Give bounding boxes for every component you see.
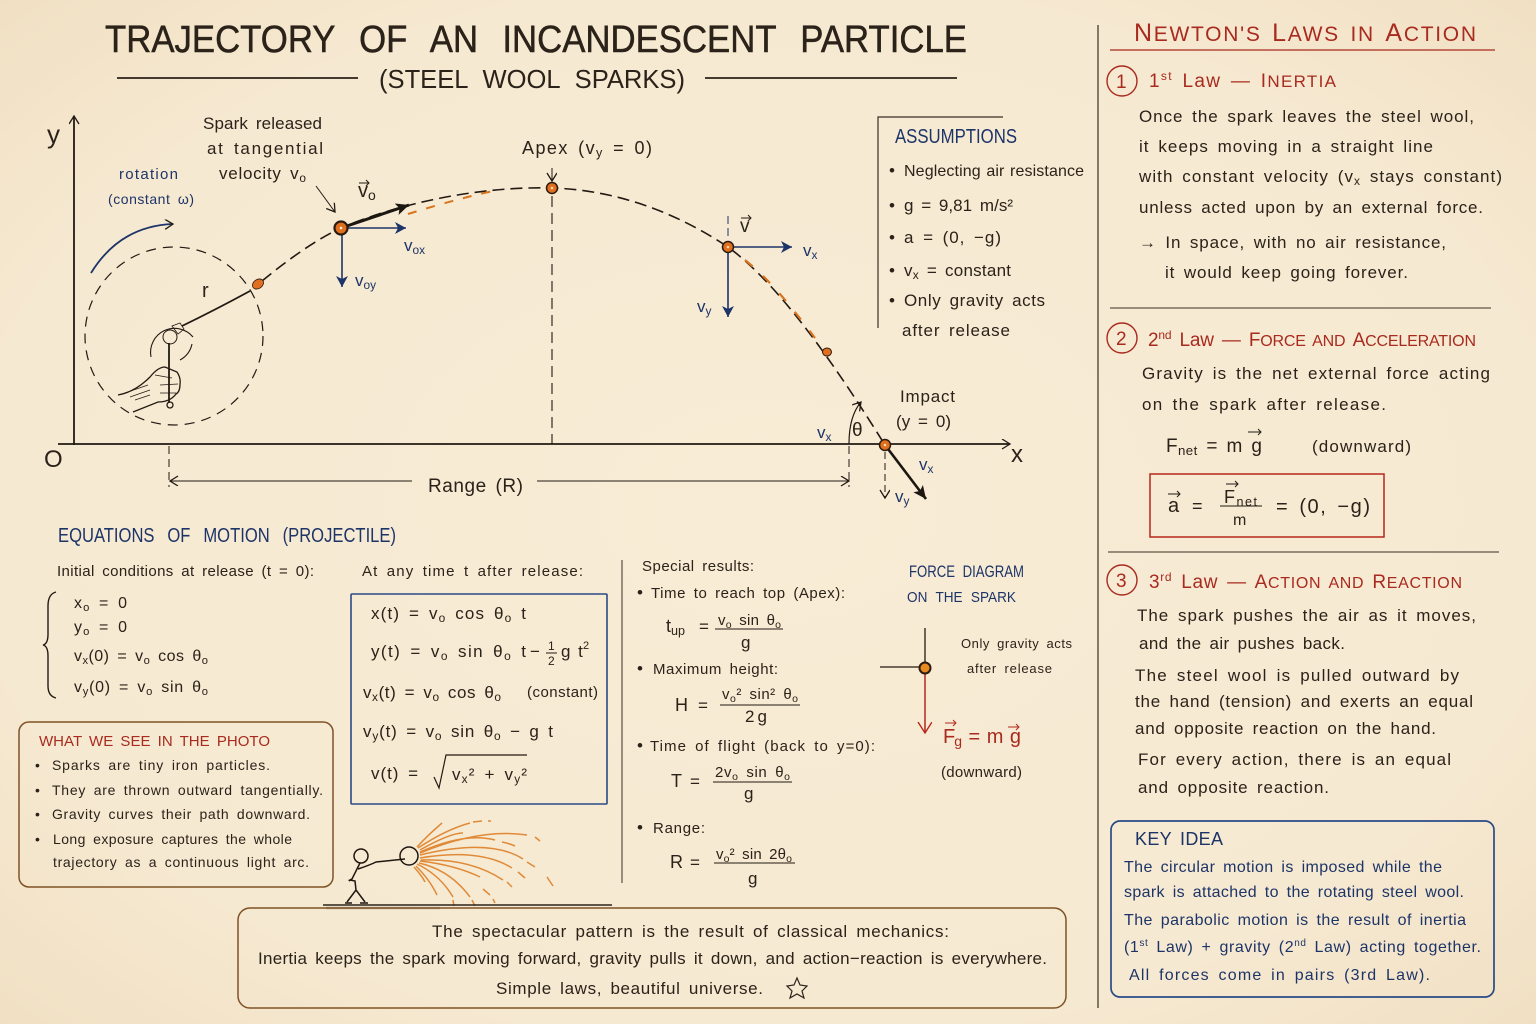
- release label: Spark released: [203, 114, 322, 133]
- axes: O: [44, 446, 63, 473]
- first law: [1107, 66, 1502, 282]
- radius label: r: [202, 280, 209, 302]
- range formula: =: [690, 853, 700, 872]
- formula box: a: [1168, 495, 1180, 517]
- second law heading: 2: [1148, 330, 1159, 351]
- range dimension: Range (R): [428, 476, 523, 497]
- descent velocity vectors: [697, 215, 818, 318]
- panel: what we see in the photo: [19, 722, 333, 887]
- formula box: m: [1233, 512, 1246, 529]
- dashed trajectory: [262, 188, 885, 445]
- panel: assumptions: •: [889, 291, 895, 310]
- impact label: Impact: [900, 387, 955, 406]
- descent velocity vectors: v: [803, 241, 812, 260]
- first law: → In space, with no air resistance,: [1139, 233, 1446, 252]
- icon: star: [787, 978, 807, 998]
- key idea box: (1: [1124, 939, 1139, 956]
- first law: it would keep going forever.: [1165, 263, 1408, 282]
- time-dependent equations: t: [512, 642, 526, 661]
- second law: (downward): [1312, 437, 1411, 456]
- time-dependent equations: (t) = v: [379, 683, 432, 702]
- time to apex: up: [671, 624, 685, 638]
- time-dependent equations: y: [372, 729, 378, 743]
- time-dependent equations: (t) = v: [379, 722, 435, 741]
- panel: special results: Special results:: [642, 558, 754, 575]
- third law heading: rd: [1160, 570, 1172, 584]
- spark particles: [251, 182, 890, 450]
- descent velocity vectors: v: [740, 216, 750, 237]
- trajectory diagram: [44, 114, 1023, 508]
- key idea box: [1111, 821, 1494, 997]
- third law: For every action, there is an equal: [1138, 750, 1451, 769]
- icon: hand holding steel wool: [118, 343, 180, 412]
- time-dependent equations: − g t: [502, 722, 553, 741]
- panel: assumptions: Only gravity acts: [904, 291, 1045, 310]
- time-dependent equations: o: [432, 690, 439, 704]
- panel: force diagram: ON THE SPARK: [907, 589, 1016, 606]
- time-dependent equations: x(t) = v: [371, 604, 437, 623]
- time to apex: v: [718, 612, 726, 629]
- callout: summary: The spectacular pattern is the result of classical mechanics:: [432, 922, 949, 941]
- time of flight: g: [744, 784, 753, 803]
- rotation label: (constant ω): [108, 191, 194, 207]
- key idea box: All forces come in pairs (3rd Law).: [1129, 967, 1430, 984]
- time of flight: T: [671, 771, 682, 791]
- callout: summary: [238, 908, 1066, 1008]
- maximum height: v: [722, 686, 730, 703]
- second law heading: ORCE AND ACCELERATION: [1260, 330, 1476, 351]
- third law heading: [1107, 565, 1462, 595]
- time-dependent equations: o: [439, 611, 446, 625]
- time-dependent equations: o: [435, 729, 442, 743]
- time to apex: o: [775, 619, 781, 631]
- panel: assumptions: •: [889, 228, 895, 247]
- initial conditions: o: [202, 686, 208, 698]
- time-dependent equations: v: [452, 765, 460, 784]
- formula box: =: [1192, 496, 1203, 516]
- second law: = m g: [1198, 436, 1262, 457]
- panel: assumptions: ASSUMPTIONS: [895, 126, 1017, 148]
- descent velocity vectors: v: [697, 297, 706, 316]
- gravity force label: F: [943, 726, 955, 748]
- apex label: y: [596, 146, 603, 160]
- key idea box: st: [1139, 938, 1148, 949]
- time to apex: Time to reach top (Apex):: [651, 585, 845, 602]
- rotation label: [91, 166, 194, 273]
- first law heading: 1: [1116, 72, 1127, 93]
- initial conditions: cos θ: [150, 648, 201, 665]
- first law: x: [1354, 174, 1360, 188]
- key idea box: nd: [1294, 938, 1306, 949]
- time-dependent equations: o: [504, 649, 511, 663]
- panel: what we see in the photo: •: [35, 757, 40, 773]
- initial conditions: y: [83, 686, 89, 698]
- release velocity vectors: oy: [364, 278, 376, 292]
- first law heading: Law — I: [1173, 71, 1266, 92]
- second law: Gravity is the net external force acting: [1142, 364, 1490, 383]
- release label: [203, 114, 335, 212]
- initial conditions: y: [74, 619, 82, 636]
- panel: what we see in the photo: Sparks are tiny iron particles.: [52, 757, 270, 773]
- maximum height: Maximum height:: [653, 661, 778, 678]
- impact label: v: [919, 455, 928, 474]
- range formula: g: [748, 869, 757, 888]
- initial conditions: o: [83, 626, 89, 638]
- time-dependent equations: 1: [548, 639, 555, 653]
- panel: what we see in the photo: They are thrown outward tangentially.: [52, 782, 323, 798]
- third law: and the air pushes back.: [1139, 634, 1345, 653]
- third law: [1107, 565, 1476, 797]
- time-dependent equations: o: [494, 690, 501, 704]
- panel: what we see in the photo: Long exposure captures the whole: [53, 831, 292, 847]
- maximum height: •: [637, 659, 643, 678]
- first law: unless acted upon by an external force.: [1139, 198, 1483, 217]
- impact label: x: [826, 430, 832, 444]
- third law: the hand (tension) and exerts an equal: [1135, 692, 1473, 711]
- first law: it keeps moving in a straight line: [1139, 137, 1433, 156]
- time-dependent equations: [351, 563, 607, 804]
- initial conditions: (0) = v: [89, 648, 143, 665]
- key idea box: Law) acting together.: [1307, 939, 1481, 956]
- descent velocity vectors: x: [812, 248, 818, 262]
- panel: force diagram: FORCE DIAGRAM: [909, 562, 1024, 581]
- panel: what we see in the photo: •: [35, 782, 40, 798]
- panel: assumptions: a = (0, −g): [904, 228, 1001, 247]
- maximum height: 2g: [745, 707, 767, 726]
- release label: o: [299, 171, 306, 185]
- maximum height: ² sin² θ: [736, 686, 792, 703]
- axes: y: [47, 119, 60, 149]
- third law heading: 3: [1116, 571, 1127, 592]
- third law: The spark pushes the air as it moves,: [1137, 606, 1476, 625]
- key idea box: Law) + gravity (2: [1148, 939, 1294, 956]
- equations heading: EQUATIONS OF MOTION (PROJECTILE): [58, 525, 396, 547]
- first law heading: 1: [1149, 71, 1160, 92]
- time-dependent equations: x: [372, 690, 378, 704]
- initial conditions: [43, 563, 314, 698]
- time of flight: =: [690, 772, 700, 791]
- time of flight: o: [784, 771, 790, 783]
- maximum height: o: [730, 693, 736, 705]
- panel: assumptions: [878, 117, 1084, 340]
- third law heading: 3: [1149, 572, 1160, 593]
- release velocity vectors: [341, 180, 425, 292]
- initial conditions: = 0: [90, 595, 127, 612]
- second law: on the spark after release.: [1142, 395, 1386, 414]
- second law: [1107, 323, 1490, 537]
- panel: force diagram: [880, 562, 1072, 781]
- callout: summary: Inertia keeps the spark moving forward, gravity pulls it down, and action−reaction is everywhere.: [258, 949, 1047, 968]
- gravity force label: [943, 720, 1021, 749]
- second law: F: [1166, 436, 1178, 457]
- title: TRAJECTORY OF AN INCANDESCENT PARTICLE: [105, 19, 967, 61]
- time to apex: •: [637, 583, 643, 602]
- time of flight: sin θ: [739, 764, 784, 781]
- release label: velocity v: [219, 164, 299, 183]
- initial conditions: x: [82, 655, 88, 667]
- release velocity vectors: v: [355, 271, 364, 290]
- time of flight: [637, 736, 875, 803]
- time-dependent equations: y: [514, 772, 520, 786]
- time-dependent equations: cos θ: [440, 683, 494, 702]
- force diagram spark: [880, 628, 930, 733]
- range formula: •: [637, 818, 643, 837]
- maximum height: =: [698, 696, 708, 715]
- panel: equations of motion: [43, 525, 607, 804]
- panel: what we see in the photo: •: [35, 806, 40, 822]
- range formula: o: [786, 853, 792, 865]
- first law heading: NERTIA: [1267, 72, 1337, 91]
- axes: [44, 116, 1023, 473]
- time-dependent equations: o: [505, 611, 512, 625]
- first law: with constant velocity (v: [1139, 167, 1353, 186]
- panel: assumptions: Neglecting air resistance: [904, 163, 1084, 180]
- release velocity vectors: v: [358, 180, 368, 202]
- gravity force label: g: [954, 733, 962, 749]
- time-dependent equations: x: [462, 772, 468, 786]
- second law heading: 2: [1116, 329, 1127, 350]
- formula box: F: [1224, 487, 1235, 507]
- panel: what we see in the photo: Gravity curves their path downward.: [52, 806, 310, 822]
- time to apex: t: [666, 616, 671, 636]
- formula box: net: [1236, 495, 1258, 509]
- time-dependent equations: v(t) =: [371, 764, 418, 783]
- maximum height: H: [675, 695, 688, 715]
- descent velocity vectors: y: [706, 304, 712, 318]
- subtitle: (STEEL WOOL SPARKS): [379, 64, 685, 94]
- range dimension: [169, 446, 849, 497]
- time-dependent equations: At any time t after release:: [362, 563, 583, 580]
- panel: force diagram: after release: [967, 661, 1052, 676]
- release label: at tangential: [207, 139, 323, 158]
- gravity force label: = m g: [961, 726, 1021, 748]
- time-dependent equations: ² + v: [469, 765, 514, 784]
- panel: assumptions: g = 9,81 m/s²: [904, 196, 1013, 215]
- time-dependent equations: ²: [521, 765, 527, 784]
- first law heading: [1107, 66, 1337, 96]
- impact label: θ: [852, 420, 863, 441]
- time-dependent equations: (constant): [527, 684, 598, 701]
- callout: summary: Simple laws, beautiful universe.: [496, 979, 763, 998]
- formula box: = (0, −g): [1276, 496, 1370, 518]
- first law: Once the spark leaves the steel wool,: [1139, 107, 1474, 126]
- range formula: ² sin 2θ: [730, 846, 786, 863]
- panel: force diagram: (downward): [941, 764, 1022, 781]
- panel: Newton's laws: [1098, 19, 1502, 1008]
- time-dependent equations: v: [363, 722, 372, 741]
- key idea box: The circular motion is imposed while the: [1124, 859, 1442, 876]
- panel: assumptions: •: [889, 161, 895, 180]
- time to apex: o: [726, 619, 732, 631]
- key idea box: The parabolic motion is the result of inertia: [1124, 912, 1466, 929]
- initial conditions: (0) = v: [89, 679, 145, 696]
- time of flight: 2v: [715, 764, 731, 781]
- second law heading: [1107, 323, 1476, 353]
- time-dependent equations: cos θ: [446, 604, 503, 623]
- panel: what we see in the photo: trajectory as a continuous light arc.: [53, 854, 309, 870]
- time-dependent equations: o: [441, 649, 448, 663]
- initial conditions: Initial conditions at release (t = 0):: [57, 563, 314, 580]
- time-dependent equations: v: [363, 683, 372, 702]
- first law: stays constant): [1361, 167, 1502, 186]
- panel: assumptions: x: [913, 268, 919, 282]
- impact label: v: [817, 423, 826, 442]
- initial conditions: o: [144, 655, 150, 667]
- time-dependent equations: 2: [548, 654, 555, 668]
- second law heading: nd: [1158, 328, 1172, 342]
- stick figure with sparks: [323, 821, 612, 908]
- panel: assumptions: after release: [902, 321, 1010, 340]
- initial conditions: v: [74, 679, 82, 696]
- initial conditions: v: [74, 648, 82, 665]
- time-dependent equations: sin θ: [442, 722, 493, 741]
- initial conditions: o: [83, 602, 89, 614]
- panel: assumptions: •: [889, 196, 895, 215]
- range formula: o: [724, 853, 730, 865]
- initial conditions: = 0: [90, 619, 127, 636]
- time to apex: =: [699, 617, 709, 636]
- third law: The steel wool is pulled outward by: [1135, 666, 1460, 685]
- maximum height: [637, 659, 800, 726]
- second law heading: Law — F: [1171, 330, 1260, 351]
- range formula: [637, 818, 795, 888]
- time of flight: Time of flight (back to y=0):: [650, 738, 875, 755]
- time of flight: •: [637, 736, 643, 755]
- apex label: [522, 138, 652, 444]
- panel: assumptions: v: [904, 261, 912, 280]
- impact label: v: [895, 487, 904, 506]
- time-dependent equations: o: [494, 729, 501, 743]
- third law heading: CTION AND REACTION: [1268, 572, 1462, 593]
- release velocity vectors: o: [368, 187, 376, 203]
- panel: what we see in the photo: •: [35, 831, 40, 847]
- initial conditions: o: [202, 655, 208, 667]
- first law heading: st: [1161, 69, 1172, 83]
- key idea box: KEY IDEA: [1135, 829, 1223, 849]
- initial conditions: o: [146, 686, 152, 698]
- time-dependent equations: g t: [561, 642, 583, 661]
- time to apex: g: [741, 633, 750, 652]
- range formula: Range:: [653, 820, 705, 837]
- rotation label: rotation: [119, 166, 178, 183]
- newton heading: NEWTON'S LAWS IN ACTION: [1134, 19, 1476, 47]
- range formula: v: [716, 846, 724, 863]
- third law heading: Law — A: [1172, 572, 1268, 593]
- time to apex: [637, 583, 845, 652]
- release velocity vectors: ox: [412, 243, 425, 257]
- axes: x: [1011, 441, 1023, 468]
- third law: and opposite reaction on the hand.: [1135, 719, 1436, 738]
- time-dependent equations: sin θ: [449, 642, 503, 661]
- second law: net: [1178, 443, 1198, 458]
- panel: assumptions: •: [889, 261, 895, 280]
- initial conditions: sin θ: [153, 679, 201, 696]
- impact label: x: [928, 462, 934, 476]
- spark fan: [414, 821, 553, 906]
- apex label: = 0): [604, 138, 652, 158]
- time to apex: sin θ: [732, 612, 775, 629]
- range formula: R: [670, 852, 683, 872]
- rotation circle: [85, 247, 263, 425]
- third law: and opposite reaction.: [1138, 778, 1329, 797]
- panel: special results: [622, 558, 875, 888]
- impact label: [817, 387, 955, 508]
- release velocity vectors: v: [404, 236, 412, 255]
- panel: assumptions: = constant: [919, 261, 1011, 280]
- stick figure: [345, 847, 418, 903]
- impact label: (y = 0): [896, 412, 951, 431]
- time of flight: o: [732, 771, 738, 783]
- panel: force diagram: Only gravity acts: [961, 636, 1072, 651]
- apex label: Apex (v: [522, 138, 595, 158]
- key idea box: spark is attached to the rotating steel wool.: [1124, 884, 1464, 901]
- initial conditions: x: [74, 595, 82, 612]
- panel: what we see in the photo: WHAT WE SEE IN THE PHOTO: [39, 733, 270, 750]
- time-dependent equations: 2: [583, 640, 589, 652]
- formula box: [1150, 474, 1384, 537]
- time-dependent equations: −: [530, 642, 540, 661]
- maximum height: o: [792, 693, 798, 705]
- time-dependent equations: t: [512, 604, 526, 623]
- time-dependent equations: y(t) = v: [371, 642, 439, 661]
- impact label: y: [904, 494, 910, 508]
